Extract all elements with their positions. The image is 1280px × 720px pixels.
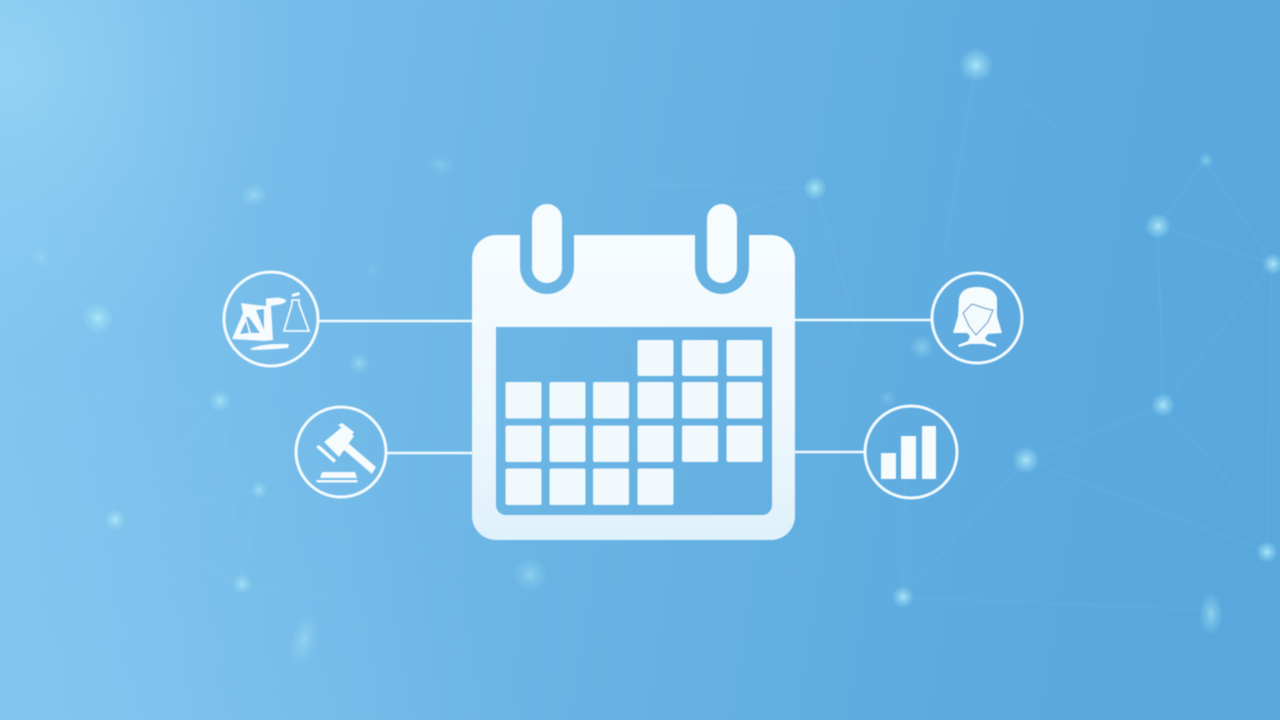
calendar icon xyxy=(472,204,795,540)
icon: scales and flask xyxy=(224,272,318,366)
network lines xyxy=(0,65,1272,610)
calendar date grid xyxy=(506,340,762,505)
icon: gavel xyxy=(296,407,386,497)
icon: person xyxy=(932,273,1022,363)
connector lines xyxy=(318,320,932,453)
icon: bar chart xyxy=(865,406,957,498)
calendar rings xyxy=(532,204,737,283)
calendar body xyxy=(472,235,795,540)
